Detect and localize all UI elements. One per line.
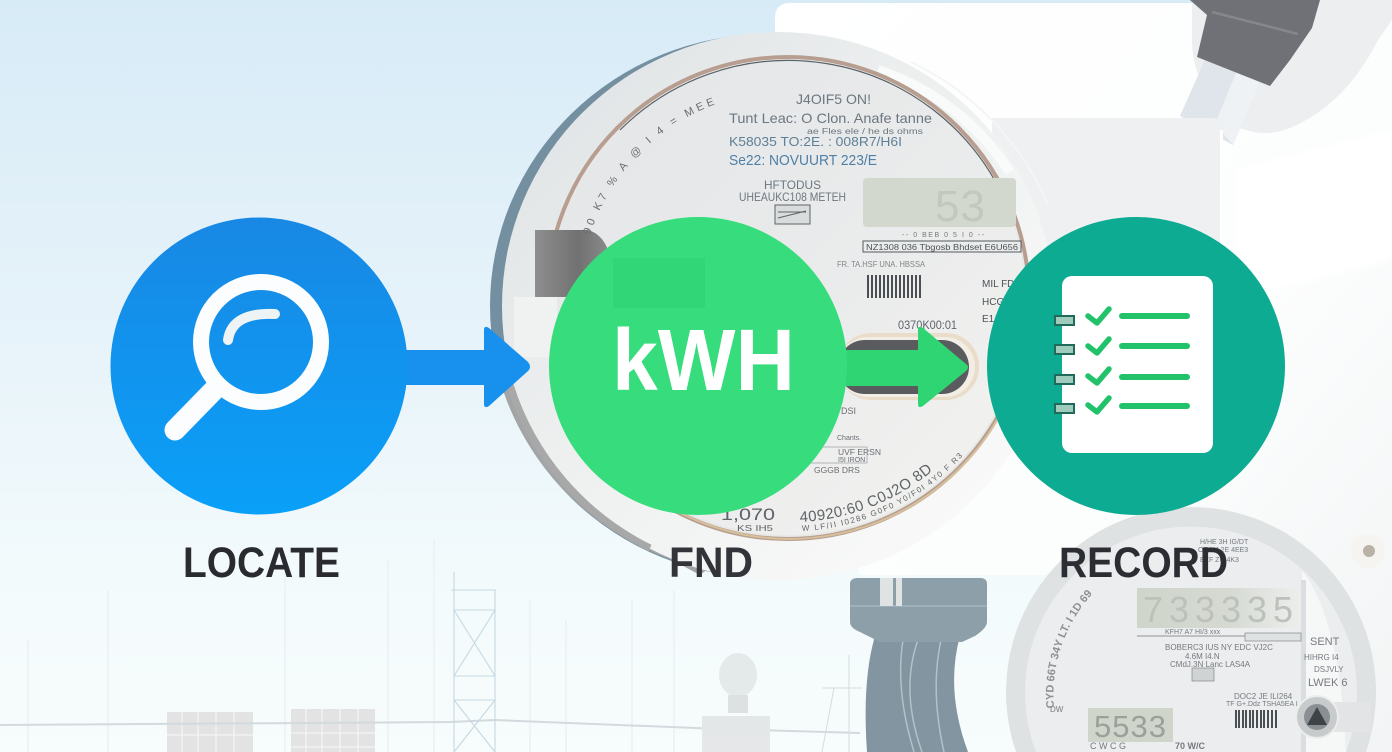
check marks — [1088, 309, 1109, 412]
label: record: RECORD — [1059, 539, 1228, 587]
meter small text: KFH7 A7 HI/3 xxx — [1165, 629, 1221, 636]
icon: checklist — [1055, 276, 1213, 453]
lower spec text block: I5I IRON — [838, 457, 865, 464]
arc text bottom right: 40920:60 C0J2O 8D — [800, 464, 930, 522]
meter small text: CYD 66T 34Y LT. I 1D 69 — [1046, 590, 1092, 708]
meter small text: 70 W/C — [1175, 741, 1206, 751]
overhead wires — [0, 720, 860, 733]
arc text bottom right: 1,070 — [721, 505, 775, 524]
heading text on face — [729, 91, 932, 204]
binder rings — [1055, 316, 1074, 413]
meter small text: DOC2 JE ILI264 — [1234, 692, 1293, 701]
right side spec text — [982, 279, 1014, 325]
LCD display: 53 — [935, 182, 985, 231]
meter small text: OE HJ.2E 4EE3 — [1198, 547, 1248, 554]
arc text top left: 90 K7 % A @ I 4 = MEE — [584, 98, 714, 234]
meter small text: BOBERC3 IUS NY EDC VJ2C — [1165, 643, 1273, 652]
small logo — [1192, 668, 1214, 681]
list lines — [1122, 316, 1187, 406]
dark slot — [838, 333, 979, 400]
upper conduit and mounting plate — [1180, 0, 1392, 145]
lower spec text block — [720, 406, 881, 475]
serial number above slot: 0370K00:01 — [898, 318, 957, 332]
meter small text: SENT — [1310, 636, 1340, 648]
arc text bottom right: KS IH5 — [737, 524, 774, 533]
right side spec text: MIL FD — [982, 279, 1014, 290]
lower spec text block: DSI — [841, 406, 856, 416]
step circle: find kWh — [549, 217, 847, 515]
meter small text: C W C G — [1090, 741, 1126, 751]
meter small text: CMdJ.3N Lanc LAS4A — [1170, 660, 1251, 669]
arc text bottom right: W LF/II I0286 G0F0 Y0/F0I 4Y0 F R3 — [802, 453, 962, 531]
main meter — [490, 32, 1028, 575]
fitting — [850, 578, 987, 642]
white band of bezel — [878, 70, 1010, 172]
arrow: find to record — [840, 327, 968, 407]
right side spec text: HCG — [982, 297, 1004, 308]
heading text on face: Tunt Leac: O Clon. Anafe tanne — [729, 110, 932, 126]
heading text on face: K58035 TO:2E. : 008R7/H6I — [729, 134, 902, 149]
main display: 733335 — [1143, 589, 1293, 630]
step circle: locate — [110, 218, 408, 514]
arrow: locate to find — [400, 327, 530, 407]
tank left — [167, 712, 253, 752]
heading text on face: HFTODUS — [764, 178, 821, 192]
small lattice — [822, 655, 862, 752]
lug — [1351, 534, 1385, 568]
heading text on face: J4OIF5 ON! — [796, 91, 871, 107]
skyline: substation, towers and wires — [0, 540, 862, 752]
heading text on face: ae Fles ele / he ds ohms — [807, 127, 923, 136]
pale conduit tube — [1180, 55, 1262, 145]
meter face — [551, 61, 1025, 535]
small logo — [775, 205, 810, 224]
lower right meter — [1006, 507, 1378, 752]
barcode — [1236, 710, 1276, 728]
dome on column — [702, 653, 770, 752]
barcode — [868, 275, 920, 298]
arc text bottom right — [721, 453, 962, 533]
meter small text: DW — [1050, 705, 1064, 714]
junction panel — [992, 118, 1223, 420]
heading text on face: Se22: NOVUURT 223/E — [729, 152, 877, 169]
kWH reading: kWH — [612, 312, 795, 409]
white meter housing — [775, 3, 1392, 752]
lower spec text block: Chants. — [837, 435, 861, 442]
meter small text: 4.6M I4.N — [1185, 652, 1220, 661]
meter small text: H/HE 3H IG/DT — [1200, 539, 1249, 546]
latch knob — [1296, 696, 1371, 738]
small spec text: FR. TA.HSF UNA. HBSSA — [837, 260, 926, 269]
meter small text: EZF ZU.4K3 — [1200, 557, 1239, 564]
LCD display — [863, 178, 1016, 231]
meter small text: TF G+.Ddz TSHA5EA I — [1226, 701, 1298, 708]
label strip — [863, 232, 1021, 252]
serial display: 5533 — [1094, 709, 1166, 744]
meter small text: LWEK 6 — [1308, 677, 1348, 689]
meter small text: HIHRG I4 — [1304, 653, 1339, 662]
lower conduit fitting and pipes — [850, 578, 987, 752]
pipe seams — [901, 640, 944, 752]
step circle: record — [987, 217, 1285, 515]
icon: magnifying glass — [175, 282, 321, 430]
label strip: -- 0 BEB 0 5 I 0 -- — [902, 232, 985, 239]
pipes — [866, 636, 968, 752]
heading text on face: UHEAUKC108 METEH — [739, 190, 846, 204]
lower spec text block: GGGB DRS — [814, 465, 860, 475]
tank right — [291, 709, 375, 752]
label strip: NZ1308 036 Tbgosb Bhdset E6U656 — [866, 242, 1018, 252]
mounting plate — [1192, 0, 1392, 133]
label: locate: LOCATE — [183, 539, 340, 587]
right side spec text: E1 — [982, 314, 995, 325]
meter small text: DSJVLY — [1314, 665, 1344, 674]
lower spec text block: UVF ERSN — [838, 447, 881, 457]
copper ring — [547, 57, 1029, 539]
left gray notch — [535, 230, 608, 297]
outer bezel — [502, 32, 1054, 580]
dark rear rim — [490, 34, 1046, 578]
dark coupling nut — [1190, 0, 1320, 86]
lattice tower — [451, 572, 496, 752]
meter small text — [1046, 538, 1348, 751]
paper — [1062, 276, 1213, 453]
label: find: FND — [669, 539, 753, 587]
